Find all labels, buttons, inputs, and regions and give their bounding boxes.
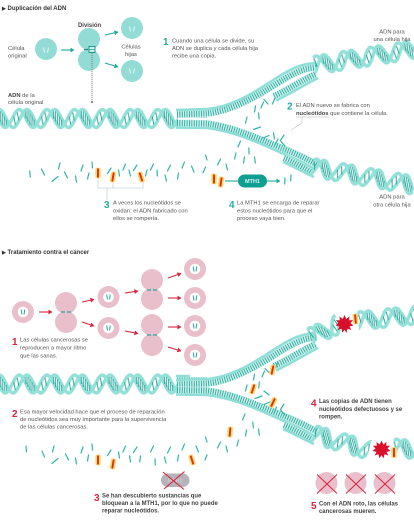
dead cancer cells: [316, 472, 396, 494]
DNA helix: lower daughter: [310, 155, 414, 197]
DNA ladder opening: cancer: [176, 376, 207, 394]
step 4 text: La MTH1 se encarga de reparar: [237, 200, 320, 206]
icon: magnified DNA square: [84, 46, 95, 52]
step 5 text: cancer: 5: [311, 501, 317, 512]
heading: Duplicación del ADN: ▶ Duplicación del ADN: [1, 6, 66, 12]
step 3 text: oxidan: el ADN fabricado con: [113, 208, 188, 214]
arrow: to upper daughter: [105, 32, 118, 35]
step 1 text: cancer: 1: [12, 337, 18, 348]
step 3 text: cancer: bloquean a la MTH1, por lo que no puede: [102, 501, 218, 507]
step 2 text: El ADN nuevo se fabrica con: [296, 103, 370, 109]
step 1 text: cancer: que las sanas.: [20, 354, 58, 360]
step 5 text: cancer: cancerosas mueren.: [319, 509, 377, 515]
DNA helix: broken lower left piece: [310, 423, 372, 462]
step 2 text: nucleótidos que contiene la célula.: [296, 111, 388, 117]
free nucleotides: cancer: [26, 362, 285, 465]
step 4 text: cancer: rompen.: [319, 414, 343, 420]
step 4 text: [229, 200, 320, 222]
step 1 text: recibe una copia.: [172, 54, 217, 60]
heading: Tratamiento contra el cáncer: ▶ Tratamiento contra el cáncer: [1, 250, 90, 256]
label: ADN para una célula hija: una célula hija: [373, 37, 411, 43]
cells: second generation: [98, 286, 120, 339]
cell: first division: [55, 292, 77, 333]
label: ADN para una célula hija: ADN para: [379, 30, 405, 36]
label: ADN de la célula original: ADN de la: [8, 93, 35, 99]
step 2 text: cancer: de las células cancerosas.: [20, 424, 88, 430]
step 1 text: 1: [163, 37, 169, 48]
MTH1 repair: MTH1: [245, 179, 260, 185]
label: células hijas: hijas: [125, 52, 137, 58]
step 1 text: Cuando una célula se divide, su: [172, 38, 254, 44]
step 3 text: cancer: 3: [94, 493, 100, 504]
icon: blocked MTH1: [161, 472, 190, 490]
step 3 text: ellos se rompería.: [113, 216, 159, 222]
step 5 text: cancer: [311, 501, 399, 515]
icon: upper break star: [336, 315, 354, 333]
cells: fourth generation: [184, 258, 206, 366]
DNA ladder opening: [176, 110, 207, 128]
label: ADN de la célula original: célula original: [8, 100, 43, 106]
step 2 text: cancer: [12, 409, 167, 430]
free nucleotides: [30, 98, 291, 184]
step 4 text: estos nucleótidos para que el: [237, 208, 312, 214]
DNA fork: lower strand: [176, 123, 318, 177]
step 1 text: cancer: reproducen a mayor ritmo: [20, 346, 86, 352]
MTH1 repair: [211, 174, 280, 188]
icon: blocked MTH1: MTH1: [168, 478, 182, 484]
DNA fork: cancer upper strand: [176, 333, 318, 384]
step 5 text: cancer: Con el ADN roto, las células: [319, 502, 398, 508]
label: ADN para otra célula hija: otra célula hija: [373, 202, 411, 208]
step 2 text: cancer: 2: [12, 409, 18, 420]
cancer cell multiplication diagram: [12, 258, 206, 366]
cells: dividing third generation: [141, 269, 163, 356]
step 3 text: cancer: reparar nucleótidos.: [102, 508, 159, 514]
DNA helix: cancer parent strand: [0, 372, 178, 396]
arrow: to lower daughter: [105, 63, 118, 67]
step 2 text: 2: [287, 102, 293, 112]
step 1 text: ADN se duplica y cada célula hija: [172, 46, 259, 52]
label: división: División: [78, 23, 101, 29]
cell: dividing cell: [78, 28, 100, 71]
oxidised nucleotide in upper helix: [352, 313, 359, 325]
DNA helix: upper daughter: [312, 37, 414, 77]
step 4 text: cancer: [311, 398, 403, 420]
cell: upper daughter: [121, 17, 143, 39]
step 2 text: cancer: de nucleótidos sea muy importante para la supervivencia: [20, 417, 167, 423]
arrow: to division: [61, 49, 74, 51]
step 3 text: cancer: [94, 493, 218, 514]
DNA helix: upper right piece: [357, 303, 414, 333]
dashed leader to DNA: [91, 53, 93, 103]
step 1 text: cancer: Las células cancerosas se: [20, 338, 88, 344]
step 4 text: cancer: Las copias de ADN tienen: [319, 399, 392, 405]
step 3 text: cancer: Se han descubierto sustancias que: [102, 494, 201, 500]
step 1 text: cancer: [12, 337, 88, 360]
step 4 text: proceso vaya bien.: [237, 216, 286, 222]
DNA fork: cancer lower strand: [176, 390, 318, 444]
step 3 text: [104, 200, 188, 222]
icon: lower break star: [372, 440, 390, 458]
oxidised nucleotides: cancer: [95, 364, 278, 470]
step 4 text: cancer: 4: [311, 398, 317, 410]
label: células hijas: Células: [121, 44, 141, 50]
step 2 text: cancer: Esa mayor velocidad hace que el proceso de reparación: [20, 410, 165, 416]
step 1 text: [163, 37, 259, 60]
cell: original cancer cell: [12, 301, 34, 323]
step 3 text: A veces los nucleótidos se: [113, 200, 181, 206]
step 3 text: 3: [104, 200, 110, 211]
DNA helix: broken upper left piece: [305, 313, 344, 348]
label: ADN para otra célula hija: ADN para: [379, 194, 405, 200]
step 2 text: [287, 102, 388, 130]
DNA fork: upper strand: [176, 63, 318, 114]
label: célula original: Célula: [8, 46, 24, 52]
step 4 text: 4: [229, 200, 235, 211]
label: célula original: original: [8, 54, 27, 60]
oxidised nucleotides with bracket: [95, 168, 145, 200]
arrows: red growth arrows: [39, 274, 181, 351]
step 4 text: cancer: nucleótidos defectuosos y se: [319, 407, 403, 413]
DNA helix: parent strand: [0, 106, 178, 130]
cell: célula original: [35, 38, 57, 60]
DNA helix: lower right piece: [392, 436, 414, 462]
cell division diagram: [8, 17, 143, 103]
cell: lower daughter: [121, 60, 143, 82]
oxidised nucleotide in lower helix: [391, 447, 397, 458]
